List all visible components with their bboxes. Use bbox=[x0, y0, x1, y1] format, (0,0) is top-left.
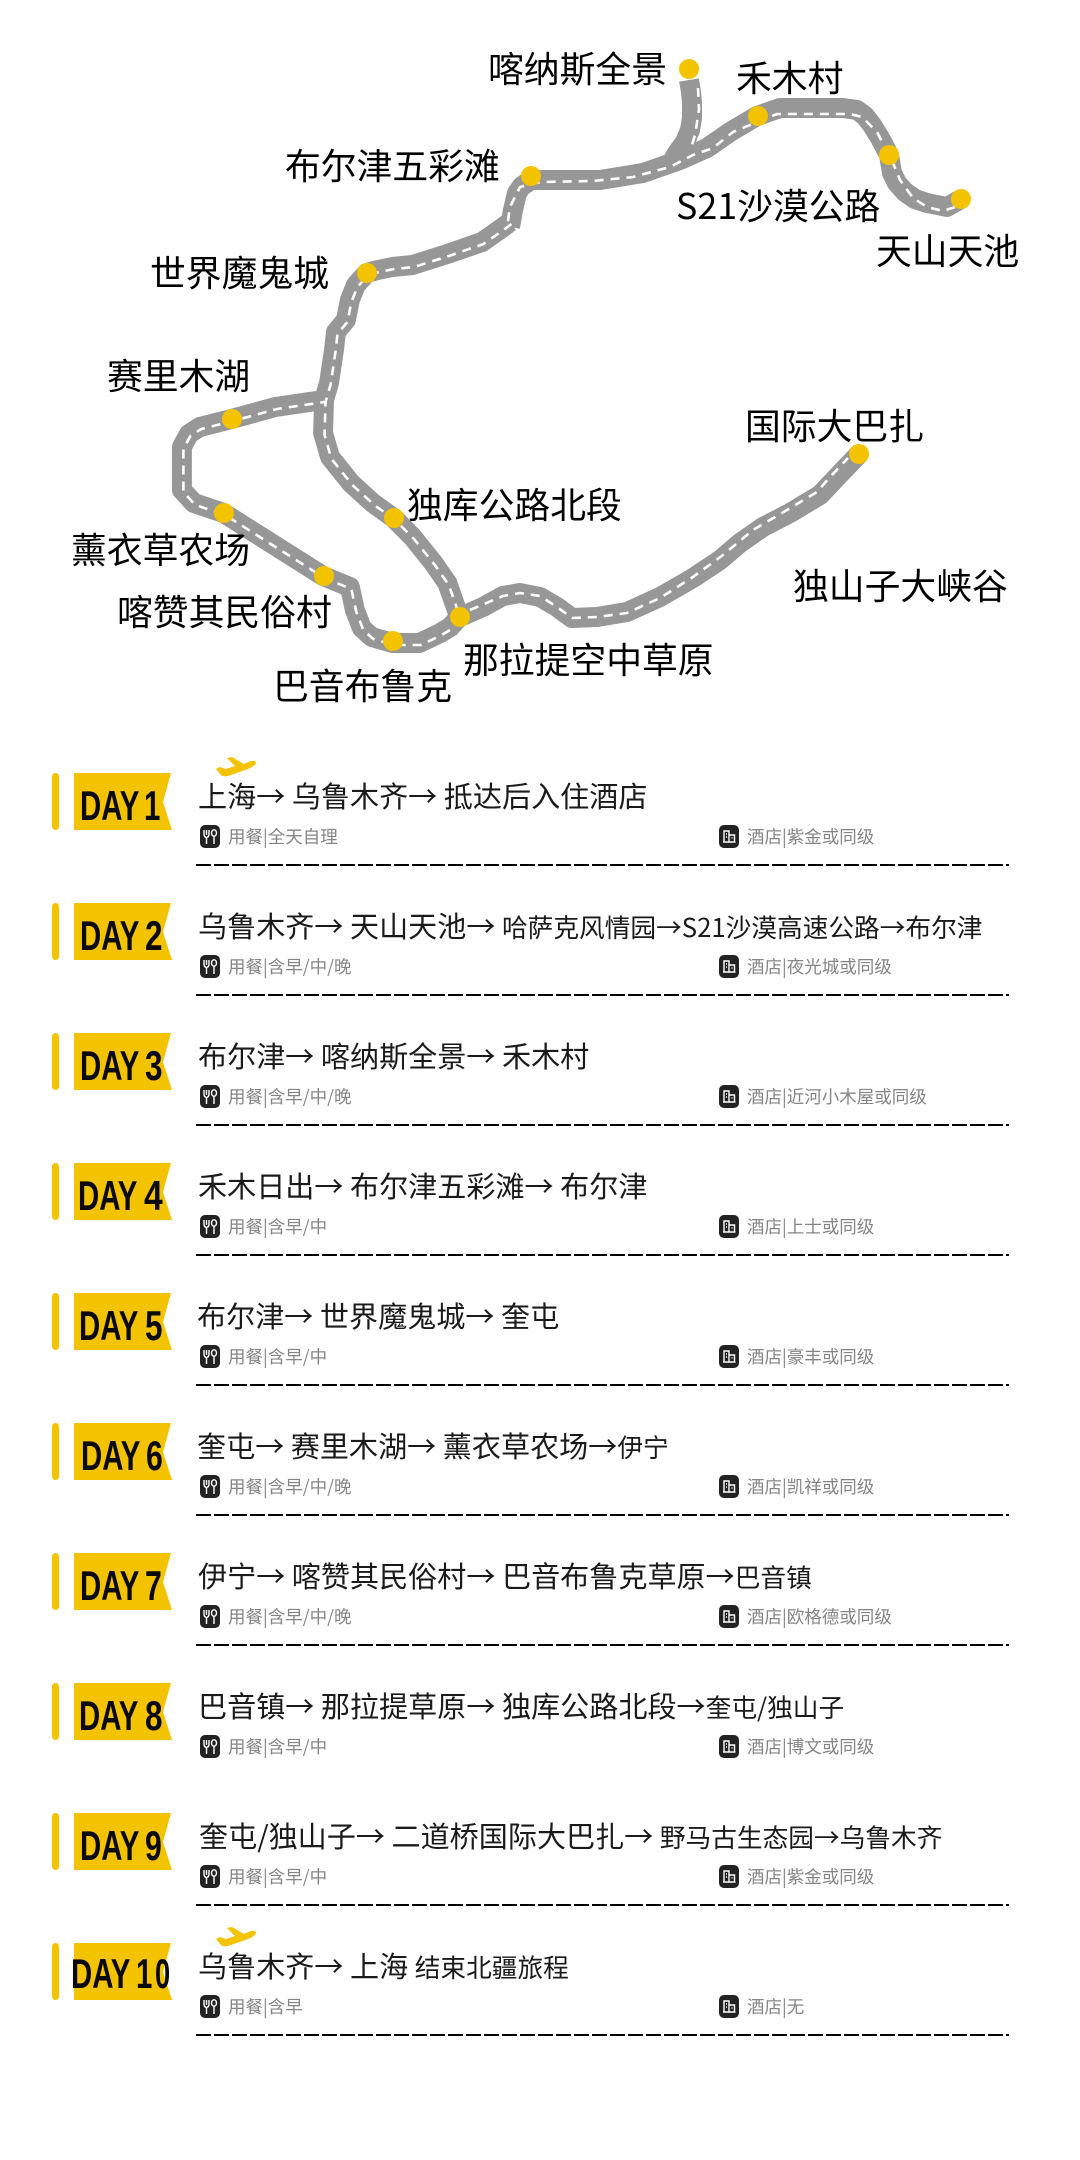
day ribbon: DAY bbox=[80, 1822, 139, 1869]
day 7 row bbox=[52, 1553, 1009, 1646]
day ribbon: 5 bbox=[145, 1302, 163, 1349]
map labels: 禾木村 bbox=[736, 50, 843, 102]
map labels: 布尔津五彩滩 bbox=[285, 138, 500, 190]
meal icon bbox=[200, 1345, 220, 1368]
meal icon bbox=[200, 825, 220, 848]
map labels: 独库公路北段 bbox=[407, 477, 622, 529]
hotel text: 酒店|紫金或同级 bbox=[747, 1864, 874, 1889]
day 3 row bbox=[52, 1033, 1009, 1126]
meal icon bbox=[200, 1995, 220, 2018]
hotel text: 酒店|无 bbox=[747, 1994, 804, 2019]
day 1 row bbox=[52, 773, 1009, 866]
map labels: 世界魔鬼城 bbox=[150, 245, 329, 297]
map labels: 那拉提空中草原 bbox=[463, 632, 714, 684]
accent bar bbox=[52, 1293, 59, 1350]
hotel text: 酒店|近河小木屋或同级 bbox=[747, 1084, 927, 1109]
hotel icon bbox=[719, 1215, 739, 1238]
day ribbon: DAY bbox=[80, 782, 139, 829]
day 2 row bbox=[52, 903, 1009, 996]
itinerary: 布尔津→ 世界魔鬼城→ 奎屯 bbox=[197, 1294, 559, 1336]
day ribbon bbox=[74, 1293, 172, 1350]
day 10 row bbox=[50, 1930, 1010, 2040]
day ribbon: DAY bbox=[80, 1042, 139, 1089]
hotel text: 酒店|凯祥或同级 bbox=[747, 1474, 874, 1499]
day 4 row bbox=[52, 1163, 1009, 1256]
hotel icon bbox=[719, 1345, 739, 1368]
itinerary: 乌鲁木齐→ 天山天池→ 哈萨克风情园→S21沙漠高速公路→布尔津 bbox=[198, 904, 982, 946]
hotel icon bbox=[719, 1475, 739, 1498]
hotel icon bbox=[719, 1605, 739, 1628]
map labels: 赛里木湖 bbox=[107, 348, 250, 400]
plane icon: day 1 bbox=[216, 757, 256, 776]
hotel text: 酒店|博文或同级 bbox=[747, 1734, 874, 1759]
map labels: 喀赞其民俗村 bbox=[117, 584, 332, 636]
road network bbox=[182, 80, 961, 645]
day ribbon: DAY bbox=[80, 912, 139, 959]
day ribbon: 6 bbox=[146, 1432, 163, 1479]
day ribbon: DAY bbox=[80, 1562, 139, 1609]
hotel text: 酒店|夜光城或同级 bbox=[747, 954, 892, 979]
day 9 row bbox=[52, 1813, 1009, 1906]
itinerary: 上海→ 乌鲁木齐→ 抵达后入住酒店 bbox=[198, 774, 647, 816]
map labels: 巴音布鲁克 bbox=[273, 658, 452, 710]
day ribbon bbox=[74, 1553, 172, 1610]
meal text: 用餐|含早/中/晚 bbox=[228, 1084, 351, 1109]
accent bar bbox=[52, 1943, 59, 2000]
itinerary: 伊宁→ 喀赞其民俗村→ 巴音布鲁克草原→巴音镇 bbox=[198, 1554, 812, 1596]
day ribbon: 8 bbox=[145, 1692, 163, 1739]
day ribbon bbox=[74, 903, 172, 960]
itinerary: 布尔津→ 喀纳斯全景→ 禾木村 bbox=[198, 1034, 589, 1076]
accent bar bbox=[52, 1163, 59, 1220]
meal text: 用餐|全天自理 bbox=[228, 824, 338, 849]
day ribbon: 0 bbox=[155, 1950, 170, 1997]
map labels bbox=[71, 41, 1019, 710]
meal text: 用餐|含早/中 bbox=[228, 1864, 327, 1889]
accent bar bbox=[52, 1553, 59, 1610]
hotel icon bbox=[719, 1085, 739, 1108]
map labels: 喀纳斯全景 bbox=[488, 41, 667, 93]
meal text: 用餐|含早/中/晚 bbox=[228, 1604, 351, 1629]
day ribbon bbox=[74, 1423, 172, 1480]
day ribbon: DAY bbox=[78, 1172, 137, 1219]
meal icon bbox=[200, 1085, 220, 1108]
day ribbon: 2 bbox=[145, 912, 163, 959]
day ribbon: 7 bbox=[145, 1562, 162, 1609]
day 6 row bbox=[52, 1423, 1009, 1516]
day ribbon: DAY bbox=[81, 1432, 140, 1479]
day ribbon bbox=[74, 1943, 184, 2001]
itinerary: 奎屯→ 赛里木湖→ 薰衣草农场→伊宁 bbox=[197, 1424, 669, 1466]
itinerary: 禾木日出→ 布尔津五彩滩→ 布尔津 bbox=[198, 1164, 647, 1206]
map labels: S21沙漠公路 bbox=[676, 178, 880, 230]
meal icon bbox=[200, 1605, 220, 1628]
plane icon: day 10 bbox=[214, 1927, 256, 1947]
hotel icon bbox=[719, 825, 739, 848]
day ribbon: 4 bbox=[144, 1174, 163, 1220]
hotel icon bbox=[719, 1995, 739, 2018]
map stops bbox=[214, 59, 971, 651]
itinerary: 乌鲁木齐→ 上海 结束北疆旅程 bbox=[198, 1944, 569, 1986]
day ribbon: DAY bbox=[79, 1692, 138, 1739]
hotel icon bbox=[719, 1865, 739, 1888]
day ribbon bbox=[74, 1163, 172, 1220]
accent bar bbox=[52, 1683, 59, 1740]
day ribbon: 3 bbox=[145, 1042, 163, 1089]
day ribbon bbox=[74, 1683, 172, 1740]
map labels: 天山天池 bbox=[876, 223, 1019, 275]
accent bar bbox=[52, 773, 59, 830]
meal text: 用餐|含早/中 bbox=[228, 1344, 327, 1369]
hotel icon bbox=[719, 955, 739, 978]
meal text: 用餐|含早/中/晚 bbox=[228, 954, 351, 979]
meal icon bbox=[200, 1215, 220, 1238]
accent bar bbox=[52, 1033, 59, 1090]
itinerary: 奎屯/独山子→ 二道桥国际大巴扎→ 野马古生态园→乌鲁木齐 bbox=[199, 1814, 942, 1856]
day 5 row bbox=[52, 1293, 1009, 1386]
hotel text: 酒店|紫金或同级 bbox=[747, 824, 874, 849]
meal icon bbox=[200, 1735, 220, 1758]
accent bar bbox=[52, 903, 59, 960]
day ribbon: 1 bbox=[136, 1950, 152, 1997]
accent bar bbox=[52, 1423, 59, 1480]
day 8 row bbox=[52, 1683, 874, 1759]
day ribbon: DAY bbox=[79, 1302, 138, 1349]
meal text: 用餐|含早/中/晚 bbox=[228, 1474, 351, 1499]
meal text: 用餐|含早/中 bbox=[228, 1734, 327, 1759]
meal icon bbox=[200, 1475, 220, 1498]
hotel text: 酒店|豪丰或同级 bbox=[747, 1344, 874, 1369]
map labels: 独山子大峡谷 bbox=[793, 558, 1008, 610]
hotel icon bbox=[719, 1735, 739, 1758]
meal icon bbox=[200, 955, 220, 978]
meal text: 用餐|含早/中 bbox=[228, 1214, 327, 1239]
day ribbon bbox=[74, 1033, 172, 1090]
route map bbox=[71, 41, 1019, 710]
day ribbon bbox=[74, 1813, 172, 1870]
accent bar bbox=[52, 1813, 59, 1870]
map labels: 国际大巴扎 bbox=[745, 398, 924, 450]
itinerary: 巴音镇→ 那拉提草原→ 独库公路北段→奎屯/独山子 bbox=[198, 1684, 844, 1726]
day ribbon bbox=[74, 773, 172, 830]
hotel text: 酒店|欧格德或同级 bbox=[747, 1604, 892, 1629]
day ribbon: 9 bbox=[145, 1822, 162, 1869]
day ribbon: DAY bbox=[71, 1950, 130, 1997]
meal icon bbox=[200, 1865, 220, 1888]
map labels: 薰衣草农场 bbox=[71, 522, 250, 574]
meal text: 用餐|含早 bbox=[228, 1994, 303, 2019]
day ribbon: 1 bbox=[144, 782, 160, 829]
hotel text: 酒店|上士或同级 bbox=[747, 1214, 874, 1239]
